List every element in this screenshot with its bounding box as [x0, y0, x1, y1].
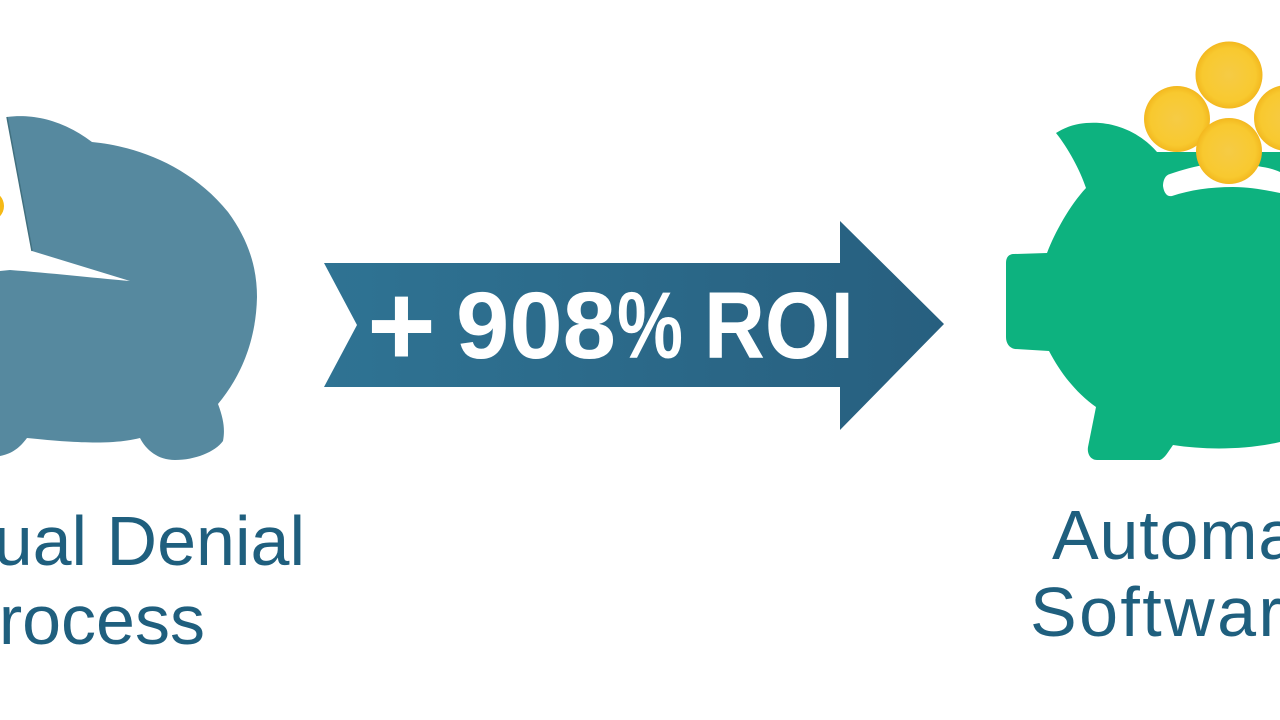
- coin: top: [1196, 42, 1262, 108]
- coin: right: [1254, 85, 1280, 151]
- coin: left: [1144, 86, 1210, 152]
- label: automated software: [1030, 496, 1280, 651]
- pig body: manual: [0, 116, 257, 460]
- coin: partly visible: [0, 191, 4, 221]
- arrow label: [367, 260, 854, 392]
- label: manual denial process: [0, 502, 305, 659]
- arrow label: 908: [456, 273, 616, 379]
- piggy bank: manual process: [0, 116, 257, 460]
- coin: bottom: [1196, 118, 1262, 184]
- piggy bank: automated software: [1006, 42, 1280, 460]
- arrow: ROI: [324, 221, 944, 430]
- arrow label: ROI: [704, 273, 854, 379]
- pig body: automated: [1006, 123, 1280, 460]
- arrow shape: [324, 221, 944, 430]
- arrow label: +: [367, 260, 436, 392]
- arrow label: %: [617, 273, 683, 379]
